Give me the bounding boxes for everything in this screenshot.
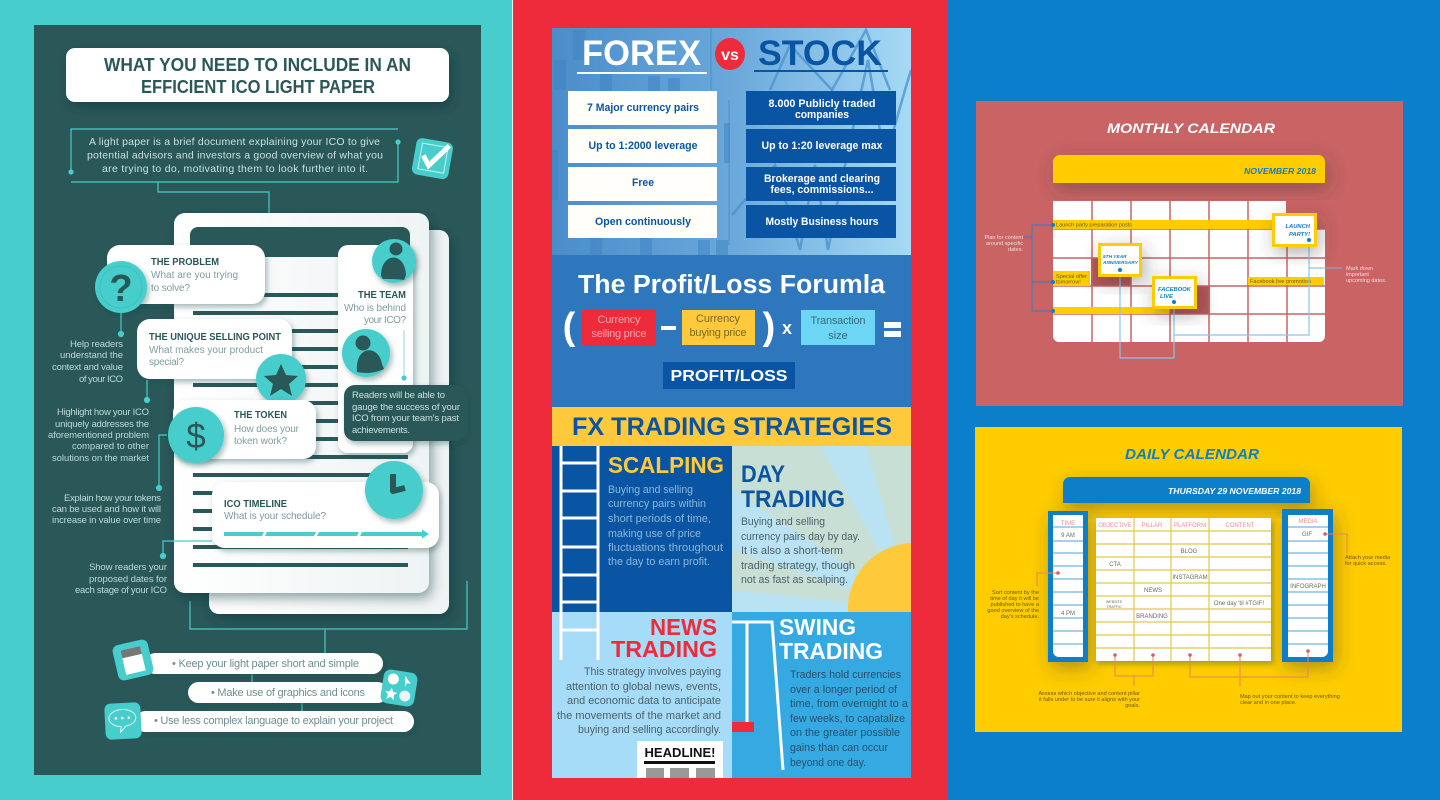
note: timeline: proposed dates for: [89, 574, 167, 585]
tip: less complex language: • Use less complex language to explain your project: [154, 715, 393, 727]
quadrant: news trading: attention to global news, events,: [566, 681, 721, 693]
quadrant: day trading: trading strategy, though: [741, 560, 855, 572]
quadrant: swing trading: SWING: [779, 614, 856, 640]
sticky: facebook live: [1154, 278, 1196, 308]
connector lines: [1120, 240, 1309, 358]
formula: Currency: [598, 314, 641, 326]
panel: forex infographic background: [513, 0, 948, 800]
calendar month bar: [1053, 155, 1325, 183]
heading: formula: The Profit/Loss Forumla: [578, 271, 886, 299]
icon: clock: [365, 461, 423, 519]
stock feature boxes: Brokerage and clearing: [764, 173, 880, 185]
event bars: [1053, 220, 1324, 314]
time column: 4 PM: [1061, 611, 1075, 617]
heading: STOCK: STOCK: [758, 34, 882, 73]
formula: size: [828, 330, 848, 342]
note: attach media: [1345, 555, 1391, 567]
card: unique selling point: special?: [149, 357, 184, 368]
card: ICO timeline: ICO TIMELINE: [224, 499, 287, 510]
note: tokens: [52, 493, 161, 526]
arrow: timeline: [224, 530, 429, 538]
event bars: Launch party preparation posts: [1056, 222, 1132, 228]
callout: readers gauge team: ICO from your team's past: [352, 413, 459, 424]
content table: [1096, 518, 1271, 661]
connector dots: [1056, 532, 1327, 657]
badge: vs: vs: [721, 47, 739, 64]
heading: daily calendar: DAILY CALENDAR: [1125, 446, 1259, 463]
note: selling point: compared to other: [72, 441, 149, 452]
formula: [563, 306, 901, 348]
quadrant: swing trading: time, from overnight to a: [790, 698, 909, 710]
note: timeline: Show readers your: [89, 562, 167, 573]
card: the problem: to solve?: [151, 283, 190, 294]
content table: INSTAGRAM: [1172, 575, 1208, 581]
icon: dollar: $: [186, 417, 206, 456]
note: tokens: can be used and how it will: [52, 504, 161, 515]
event bars: tomorrow!: [1056, 280, 1081, 286]
stock feature boxes: companies: [795, 109, 849, 121]
callout: readers gauge team: Readers will be able to: [352, 390, 445, 401]
note: plan for content: [984, 223, 1055, 313]
note: map out content: [1240, 694, 1340, 706]
time column: [1048, 511, 1088, 662]
note: mark down dates: [1309, 266, 1387, 284]
sticky: facebook live: LIVE: [1160, 294, 1174, 300]
icon: star: [256, 354, 306, 404]
bottom bracket connector: [190, 581, 467, 653]
date bar: [1063, 477, 1310, 503]
callout: readers gauge team: achievements.: [352, 425, 410, 436]
note: sort content: published to have a: [990, 602, 1040, 608]
note: timeline: [75, 562, 167, 596]
note: mark down dates: upcoming dates.: [1346, 278, 1387, 284]
intro text block: A light paper is a brief document explaining your ICO to give: [89, 136, 380, 148]
card: the team: Who is behind: [344, 303, 406, 314]
formula: ): [763, 306, 775, 348]
note: assess objective: it falls under to be sure it aligns with your: [1039, 697, 1140, 703]
formula: x: [782, 318, 792, 338]
icon: swing: [732, 622, 783, 770]
card: ICO timeline: What is your schedule?: [224, 511, 326, 522]
content table: WEBSITE: [1106, 600, 1123, 604]
sticky: launch party: LAUNCH: [1286, 224, 1311, 230]
content table: PILLAR: [1142, 523, 1163, 529]
quadrant: day trading: [732, 446, 913, 612]
note: selling point: [48, 407, 149, 464]
note: plan for content: Plan for content: [984, 235, 1023, 241]
calendar grid: [1053, 201, 1325, 342]
callout: readers gauge team: gauge the success of your: [352, 402, 460, 413]
quadrant: news trading: the movements of the market and: [557, 710, 721, 722]
quadrant: day trading: DAY: [741, 461, 785, 488]
heading: monthly calendar: MONTHLY CALENDAR: [1107, 120, 1276, 136]
content table: CTA: [1109, 562, 1121, 568]
quadrant: scalping: [552, 446, 732, 612]
quadrant: day trading: not as fast as scalping.: [741, 574, 848, 586]
quadrant: swing trading: few weeks, to capatalize: [790, 713, 905, 725]
document illustration: [174, 213, 449, 614]
tip: graphics and icons: • Make use of graphics and icons: [211, 687, 366, 699]
intro text block: [68, 129, 401, 213]
quadrant: news trading: TRADING: [611, 636, 717, 662]
card: ICO timeline: [212, 461, 439, 548]
note: tokens: increase in value over time: [52, 515, 161, 526]
note: assess objective: goals.: [1125, 703, 1140, 709]
time column: 9 AM: [1061, 533, 1075, 539]
sticky: anniversary: [1100, 244, 1140, 276]
connectors: [1037, 534, 1347, 686]
note: problem: understand the: [60, 350, 123, 361]
media column: [1282, 509, 1333, 662]
icon: checkbox: [411, 137, 454, 180]
connectors to side notes: [118, 313, 212, 558]
content table: PLATFORM: [1174, 523, 1206, 529]
quadrant: swing trading: on the greater possible: [790, 727, 900, 739]
note: sort content: Sort content by the: [992, 590, 1039, 596]
note: problem: Help readers: [70, 339, 123, 350]
quadrant: news trading: and economic data to anticipate: [567, 695, 721, 707]
forex feature boxes: Open continuously: [595, 216, 692, 228]
intro text block: are trying to do, motivating them to look further into it.: [102, 163, 368, 175]
tip: less complex language: [135, 711, 414, 732]
content table: CONTENT: [1226, 523, 1255, 529]
quadrant: scalping: the day to earn profit.: [608, 556, 710, 568]
tips list: [104, 638, 418, 740]
note: sort content: time of day it will be: [990, 596, 1039, 602]
icon: headline newspaper: [637, 741, 723, 778]
sticky: anniversary: 5TH YEAR: [1103, 254, 1127, 260]
content table: BLOG: [1181, 549, 1198, 555]
card: unique selling point: THE UNIQUE SELLING POINT: [149, 332, 281, 343]
quadrant: day trading: It is also a short-term: [741, 545, 843, 557]
stock feature boxes: Up to 1:20 leverage max: [762, 140, 883, 152]
card: the team: [338, 239, 416, 453]
panel: ICO light paper: [34, 25, 481, 775]
card: the team: THE TEAM: [358, 290, 406, 301]
media column: INFOGRAPH: [1290, 584, 1326, 590]
quadrant: scalping: fluctuations throughout: [608, 542, 724, 554]
note: assess objective: [1038, 691, 1140, 709]
quadrant: scalping: short periods of time,: [608, 513, 711, 525]
panel: ICO light paper infographic background: [0, 0, 512, 800]
panel: daily calendar: [975, 427, 1402, 732]
note: timeline: each stage of your ICO: [75, 585, 167, 596]
note: sort content: good overview of the: [987, 608, 1039, 614]
note: plan for content: dates.: [1008, 247, 1023, 253]
stock feature boxes: 8.000 Publicly traded: [768, 98, 876, 110]
quadrant: day trading: Buying and selling: [741, 516, 825, 528]
card: unique selling point: What makes your product: [149, 345, 263, 356]
note: assess objective: Assess which objective and content pillar: [1038, 691, 1140, 697]
icon: ladder: [561, 446, 598, 660]
quadrant: scalping: currency pairs within: [608, 498, 706, 510]
title card: EFFICIENT ICO LIGHT PAPER: [141, 77, 375, 97]
quadrant: swing trading: beyond one day.: [790, 757, 866, 769]
formula: Currency: [696, 313, 740, 325]
content table: OBJECTIVE: [1098, 523, 1132, 529]
icon: team member one: [372, 239, 416, 283]
quadrant: news trading: NEWS: [650, 614, 717, 640]
quadrant: swing trading: [732, 612, 911, 778]
icon: speech bubble: [104, 702, 142, 740]
calendar month bar: NOVEMBER 2018: [1244, 167, 1317, 176]
card: the token: [168, 400, 316, 463]
icon: team member two: [342, 329, 390, 377]
note: selling point: solutions on the market: [52, 453, 149, 464]
note: map out content: clear and in one place.: [1240, 700, 1297, 706]
note: problem: of your ICO: [79, 374, 123, 385]
content table: One day 'til #TGIF!: [1214, 601, 1264, 607]
note: problem: context and value: [52, 362, 123, 373]
content table: NEWS: [1144, 588, 1162, 594]
note: plan for content: around specific: [986, 241, 1023, 247]
card: the problem: THE PROBLEM: [151, 257, 219, 268]
title card: WHAT YOU NEED TO INCLUDE IN AN: [104, 55, 411, 75]
stock feature boxes: [746, 91, 896, 238]
content table: TRAFFIC: [1106, 605, 1122, 609]
icon: paper: [111, 638, 155, 682]
icon: headline newspaper: HEADLINE!: [644, 746, 716, 760]
note: selling point: Highlight how your ICO: [57, 407, 149, 418]
forex feature boxes: 7 Major currency pairs: [587, 102, 699, 114]
quadrant: swing trading: TRADING: [779, 638, 883, 664]
content table: BRANDING: [1136, 614, 1168, 620]
time column: TIME: [1061, 521, 1075, 527]
quadrant: news trading: [552, 612, 732, 778]
title card: [66, 48, 449, 102]
sticky: anniversary: ANNIVERSARY: [1102, 260, 1139, 266]
badge: vs: [715, 38, 745, 70]
quadrant: day trading: TRADING: [741, 486, 845, 513]
tip: short and simple: • Keep your light paper short and simple: [172, 658, 359, 670]
event bars: Special offer: [1056, 274, 1087, 280]
note: selling point: aforementioned problem: [48, 430, 149, 441]
tip: graphics and icons: [188, 682, 388, 703]
callout: readers gauge team: [344, 385, 467, 441]
formula: selling price: [592, 328, 646, 340]
panel: monthly calendar: [976, 101, 1403, 406]
card: unique selling point: [137, 319, 306, 404]
quadrant: news trading: This strategy involves paying: [584, 666, 721, 678]
sticky: launch party: PARTY!: [1289, 232, 1310, 238]
result: profit loss: [663, 362, 795, 389]
media column: MEDIA: [1298, 519, 1318, 525]
card: the problem: What are you trying: [151, 270, 238, 281]
forex feature boxes: [568, 91, 717, 238]
note: sort content: day's schedule.: [1001, 614, 1039, 620]
formula: Transaction: [810, 315, 866, 327]
card: the team: your ICO?: [364, 315, 406, 326]
note: map out content: Map out your content to keep everything: [1240, 694, 1340, 700]
sticky: launch party: [1274, 214, 1316, 246]
tip: short and simple: [145, 653, 383, 674]
quadrant: swing trading: Traders hold currencies: [790, 669, 901, 681]
note: attach media: for quick access.: [1345, 561, 1387, 567]
media column: GIF: [1302, 532, 1312, 538]
panel: forex versus stock: [552, 28, 913, 778]
note: attach media: Attach your media: [1345, 555, 1391, 561]
heading band: FX trading strategies: FX TRADING STRATEGIES: [572, 413, 892, 441]
panel: calendars background: [948, 0, 1440, 800]
note: selling point: uniquely addresses the: [55, 419, 149, 430]
intro text block: potential advisors and investors a good overview of what you: [87, 150, 383, 162]
quadrant: scalping: Buying and selling: [608, 484, 693, 496]
stock feature boxes: Mostly Business hours: [766, 216, 878, 228]
forex feature boxes: Free: [632, 177, 654, 189]
comparison background with charts: [552, 28, 911, 255]
note: tokens: Explain how your tokens: [64, 493, 161, 504]
card: the token: How does your: [234, 424, 300, 435]
note: mark down dates: important: [1346, 272, 1369, 278]
forex feature boxes: Up to 1:2000 leverage: [588, 140, 698, 152]
icon: question mark: ?: [109, 268, 133, 310]
formula: (: [563, 306, 576, 348]
card: the token: THE TOKEN: [234, 410, 287, 421]
heading band: FX trading strategies: [552, 407, 911, 446]
event bars: Facebook live promotion: [1250, 279, 1311, 285]
icon: dollar: [168, 407, 224, 463]
stock feature boxes: fees, commissions...: [770, 184, 874, 196]
section: profit loss formula: [552, 255, 911, 407]
formula: buying price: [690, 327, 746, 339]
note: problem: [52, 339, 123, 385]
quadrant: scalping: making use of price: [608, 528, 701, 540]
date bar: THURSDAY 29 NOVEMBER 2018: [1168, 487, 1302, 496]
quadrant: news trading: buying and selling accordingly.: [578, 724, 721, 736]
sticky: facebook live: FACEBOOK: [1158, 287, 1192, 293]
quadrant: swing trading: over a longer period of: [790, 684, 898, 696]
icon: question mark: [95, 261, 147, 313]
card: the problem: [95, 245, 265, 313]
quadrant: swing trading: gains than can occur: [790, 742, 888, 754]
note: sort content: [987, 590, 1040, 620]
card: the token: token work?: [234, 436, 287, 447]
note: mark down dates: Mark down: [1346, 266, 1373, 272]
quadrant: scalping: SCALPING: [608, 452, 724, 478]
heading: FOREX: FOREX: [582, 34, 702, 73]
icon: graphics set: [380, 669, 418, 707]
quadrant: day trading: currency pairs day by day.: [741, 531, 860, 543]
result: profit loss: PROFIT/LOSS: [670, 368, 788, 385]
